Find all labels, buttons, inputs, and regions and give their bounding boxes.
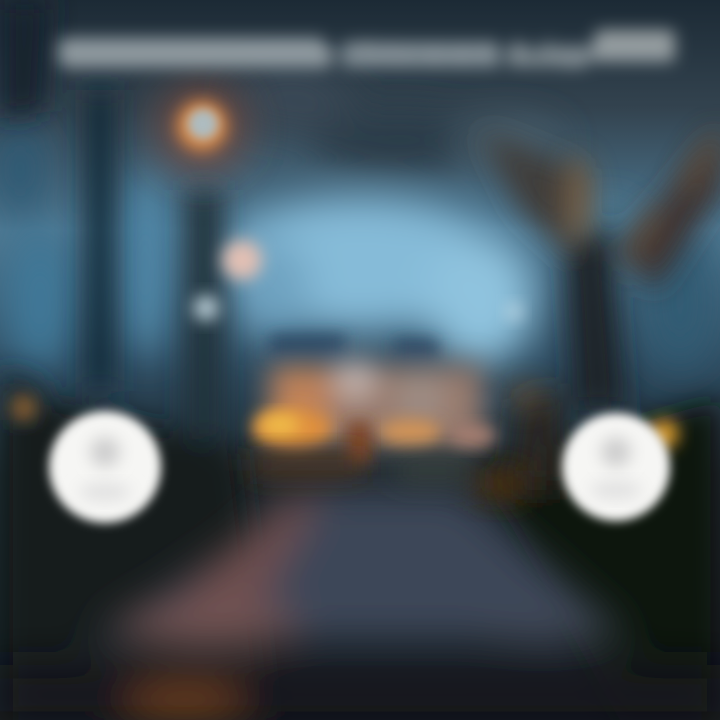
- title: [55, 30, 675, 69]
- house: lit windows: [252, 408, 496, 462]
- house: roofs: [270, 335, 495, 408]
- house at the end of the road: [250, 335, 525, 500]
- title: Enchanting Street Lights: [55, 36, 665, 69]
- icon: left white circle badge: [49, 411, 161, 523]
- icon: right white circle badge: [562, 413, 679, 521]
- house: ground hedge: [250, 455, 525, 500]
- dark trees on the right: [480, 130, 720, 720]
- small lights, left centre: [10, 240, 523, 422]
- street lamp glow, upper left: [157, 83, 247, 173]
- glow: central bright sky: [0, 72, 716, 370]
- house: facade: [268, 358, 483, 445]
- road surface: [0, 490, 720, 720]
- warm branches on the right: [507, 125, 720, 405]
- dark trees on the left: [0, 0, 270, 720]
